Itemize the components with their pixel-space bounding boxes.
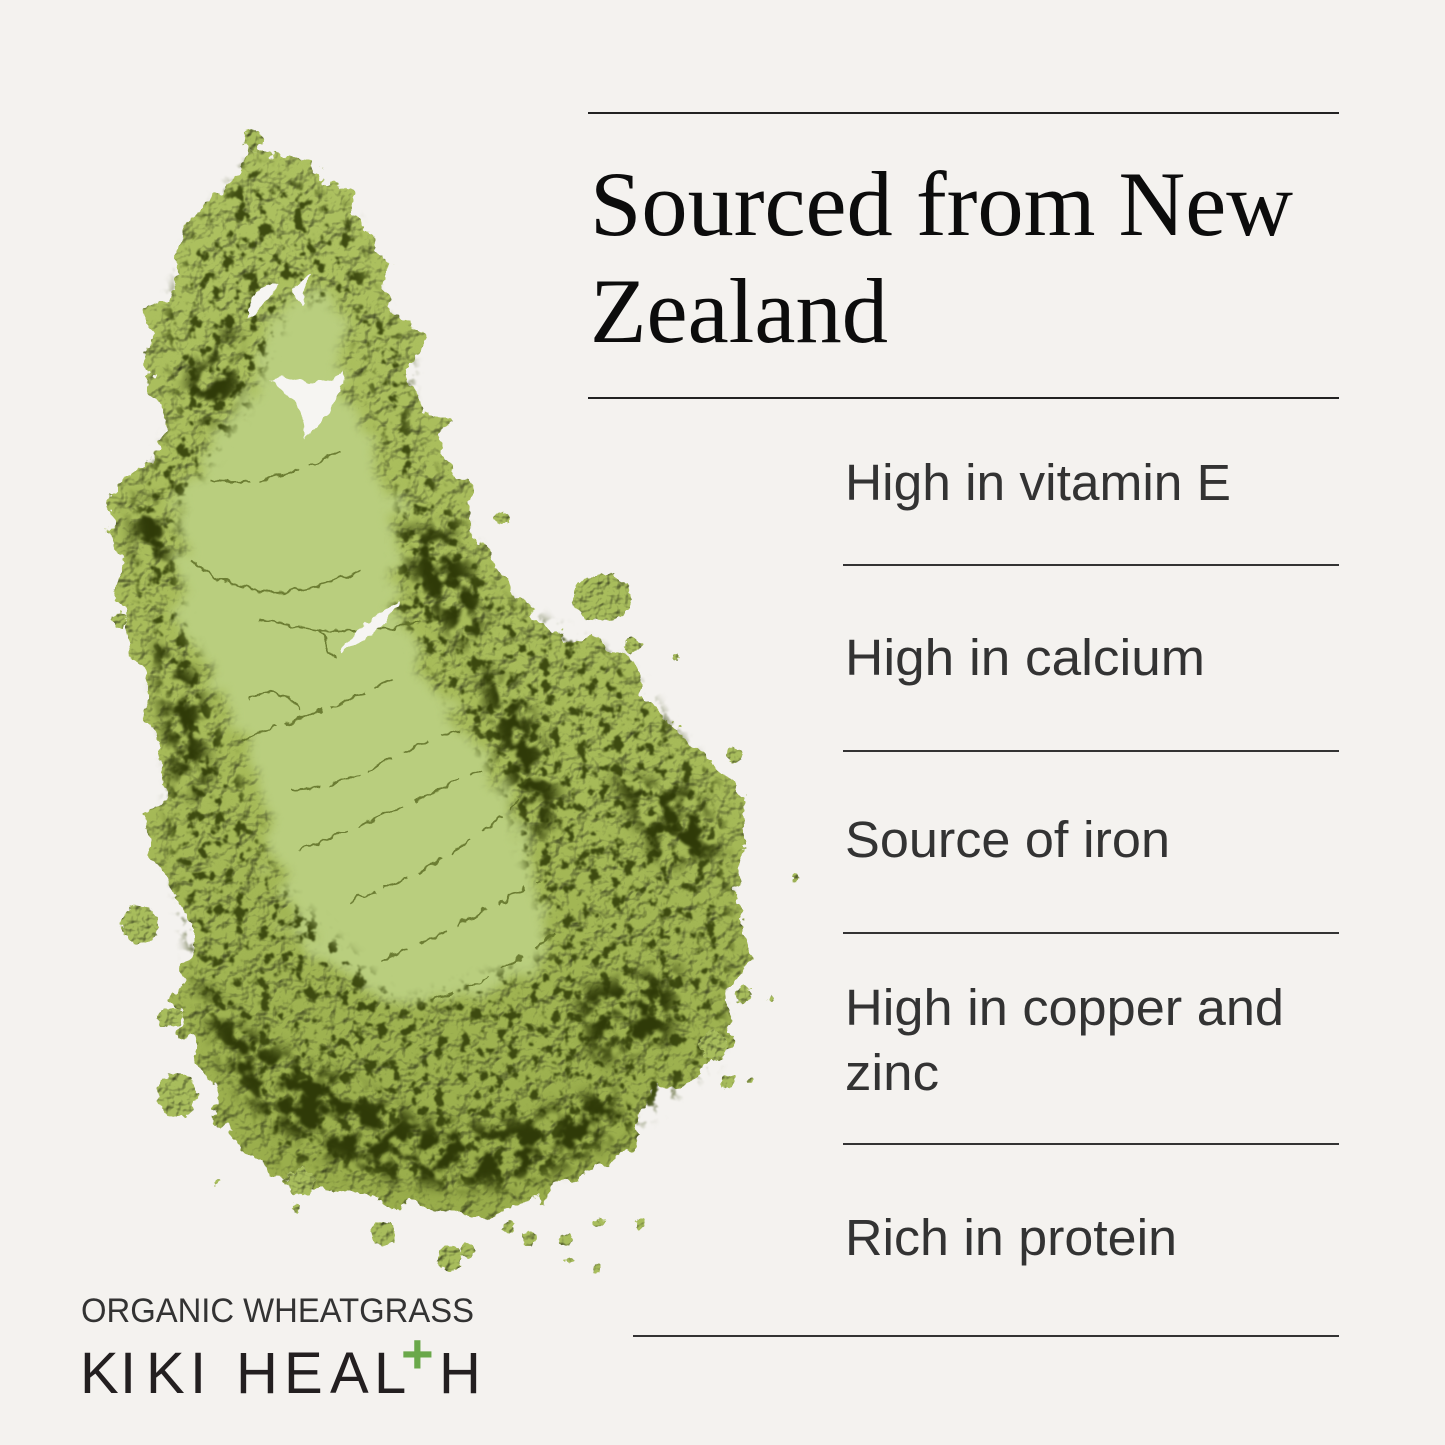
bottom rule — [633, 1335, 1339, 1337]
rule above title — [588, 112, 1339, 114]
surface cracks — [190, 450, 560, 1000]
brand block — [80, 1292, 481, 1406]
title panel — [588, 112, 1339, 399]
logo: Kiki Health: + — [401, 1322, 434, 1385]
benefit: calcium: High in calcium — [845, 629, 1205, 686]
benefit: vitamin E: High in vitamin E — [845, 454, 1231, 511]
benefits list — [633, 454, 1339, 1337]
logo: Kiki Health: KIKI HEAL — [80, 1341, 406, 1406]
benefit: protein: Rich in protein — [845, 1209, 1177, 1266]
product name: ORGANIC WHEATGRASS — [81, 1292, 474, 1330]
loose powder crumbs — [113, 130, 799, 1272]
divider — [843, 750, 1339, 752]
logo: Kiki Health: H — [439, 1341, 481, 1406]
powder pile body — [108, 130, 750, 1215]
benefit: iron: Source of iron — [845, 811, 1170, 868]
bare gaps in powder — [248, 272, 398, 652]
rule below title — [588, 397, 1339, 399]
divider — [843, 564, 1339, 566]
title: Sourced from New — [590, 153, 1294, 255]
dark crevices and shadows — [130, 320, 720, 1187]
benefit: copper and zinc: zinc — [845, 1044, 939, 1101]
divider — [843, 932, 1339, 934]
image: wheatgrass powder — [108, 130, 799, 1272]
fine dappled shadows in clumps — [135, 160, 730, 1190]
benefit: copper and zinc: High in copper and — [845, 979, 1284, 1036]
smooth pressed powder area — [175, 290, 555, 1005]
title: Zealand — [590, 260, 888, 362]
divider — [843, 1143, 1339, 1145]
